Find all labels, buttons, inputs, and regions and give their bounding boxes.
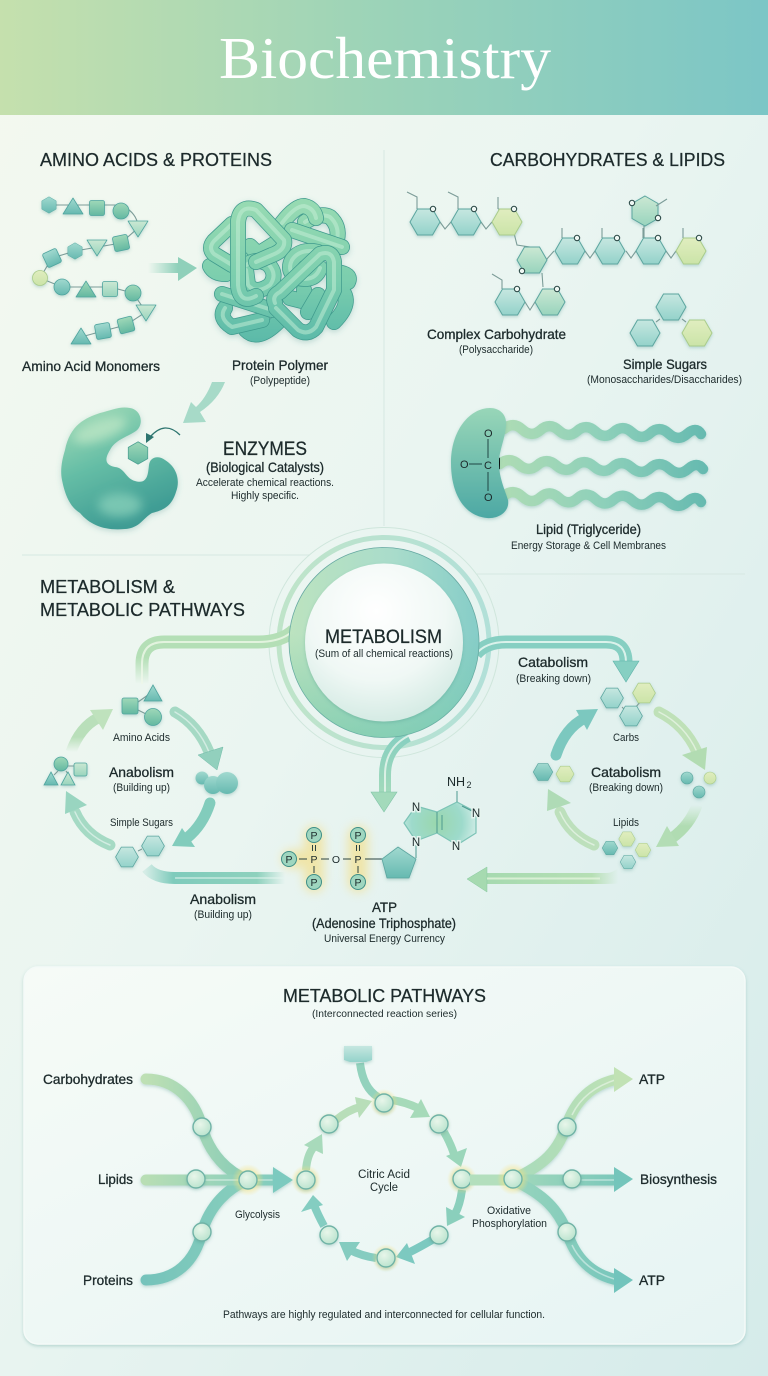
ATP molecule: P xyxy=(285,854,293,866)
panel: metabolism xyxy=(40,528,716,945)
arrow: catabolism bottom left xyxy=(547,789,594,845)
label: carbs: Carbs xyxy=(613,732,639,744)
label: ATP: ATP xyxy=(372,899,397,915)
arrow: monomers to polymer xyxy=(148,257,197,281)
nodes: inputs xyxy=(187,1118,211,1241)
ATP molecule: P xyxy=(310,877,318,889)
footer note: Pathways are highly regulated and interconnected for cellular function. xyxy=(223,1309,545,1321)
label: enzymes: ENZYMES xyxy=(223,439,307,460)
phosphate glow xyxy=(282,826,368,892)
label: enzymes: (Biological Catalysts) xyxy=(206,459,324,475)
title banner xyxy=(0,0,768,115)
top feeder xyxy=(344,1046,378,1097)
heading: metabolism xyxy=(40,577,245,620)
node: glycolysis hub xyxy=(232,1164,264,1196)
heading: metabolism: METABOLIC PATHWAYS xyxy=(40,600,245,620)
diverging outputs xyxy=(470,1067,633,1293)
label: lipid: Lipid (Triglyceride) xyxy=(536,521,641,537)
ATP molecule: O xyxy=(332,854,340,866)
label: breaking down: (Breaking down) xyxy=(589,782,663,794)
enzyme xyxy=(61,407,180,529)
label: citric acid: Citric Acid xyxy=(358,1169,410,1181)
label: building up lower: (Building up) xyxy=(194,909,252,921)
label: protein polymer: Protein Polymer xyxy=(232,357,328,373)
label: complex carbohydrate: Complex Carbohydrate xyxy=(427,326,566,342)
label: metabolism: METABOLISM xyxy=(325,627,442,648)
label: enzymes: Accelerate chemical reactions. xyxy=(196,477,334,489)
metabolism sphere xyxy=(289,548,479,738)
label: anabolism center: Anabolism xyxy=(109,764,174,780)
ATP molecule: P xyxy=(310,854,318,866)
label: oxidative phosphorylation: Oxidative xyxy=(487,1205,531,1217)
lipids hexagons xyxy=(602,832,651,869)
label: lipids: Lipids xyxy=(98,1171,133,1187)
heading: carbohydrates: CARBOHYDRATES & LIPIDS xyxy=(490,150,725,170)
converging inputs xyxy=(146,1079,293,1280)
lipid triglyceride: O xyxy=(484,428,493,440)
arrow: anabolism top right xyxy=(175,712,223,770)
arrow: anabolism top left xyxy=(71,709,113,752)
label: simple sugars: Simple Sugars xyxy=(110,817,173,829)
panel: amino acids and proteins xyxy=(22,150,349,529)
ATP molecule: P xyxy=(354,854,362,866)
label: biosynthesis: Biosynthesis xyxy=(640,1171,717,1187)
label: amino acids: Amino Acids xyxy=(113,732,170,744)
label: simple sugars: Simple Sugars xyxy=(623,356,707,372)
adenine xyxy=(404,775,480,858)
label: enzymes: Highly specific. xyxy=(231,490,299,502)
nodes: outputs xyxy=(558,1118,581,1241)
heading: metabolism: METABOLISM & xyxy=(40,577,175,597)
label: oxidative phosphorylation: Phosphorylation xyxy=(472,1218,547,1230)
flow: metabolism to catabolism xyxy=(476,642,639,682)
label: oxidative phosphorylation xyxy=(472,1205,547,1230)
label: lipids: Lipids xyxy=(613,817,639,829)
node: oxidative hub xyxy=(497,1163,529,1195)
sugars hexagons xyxy=(116,836,164,867)
amino acids molecule xyxy=(122,685,162,726)
sphere outer rings xyxy=(269,528,499,758)
label: energy storage: Energy Storage & Cell Membranes xyxy=(511,540,666,552)
protein polymer xyxy=(210,206,349,334)
heading: metabolic pathways: METABOLIC PATHWAYS xyxy=(283,986,486,1006)
label: sum of reactions: (Sum of all chemical reactions) xyxy=(315,648,453,660)
lipid triglyceride: O xyxy=(484,492,493,504)
phosphate bonds xyxy=(299,845,383,873)
label: polysaccharide: (Polysaccharide) xyxy=(459,344,533,356)
arrow: anabolism bottom left xyxy=(65,791,110,845)
adenine: N xyxy=(412,837,420,849)
label: breaking down upper: (Breaking down) xyxy=(516,673,591,685)
arrow: anabolism bottom right xyxy=(172,803,210,847)
subheading: (Interconnected reaction series) xyxy=(312,1008,457,1020)
label: adenosine triphosphate: (Adenosine Triphosphate) xyxy=(312,915,456,931)
simple sugars xyxy=(630,294,712,346)
molecule: left xyxy=(44,757,87,785)
complex carbohydrate structure xyxy=(407,192,706,315)
panel: carbohydrates and lipids xyxy=(407,150,742,552)
ATP molecule: P xyxy=(354,877,362,889)
catabolism cycle xyxy=(533,683,716,869)
cycle glow xyxy=(291,1089,477,1272)
label: cycle: Cycle xyxy=(370,1182,398,1194)
label: amino acid monomers: Amino Acid Monomers xyxy=(22,358,160,374)
molecule: left pair xyxy=(533,764,574,782)
carbs hexagons xyxy=(601,683,655,726)
ATP molecule: P xyxy=(310,830,318,842)
label: catabolism center: Catabolism xyxy=(591,764,661,780)
ATP molecule: P xyxy=(354,830,362,842)
molecule: circles xyxy=(681,772,716,798)
label: building up: (Building up) xyxy=(113,782,170,794)
arrow: catabolism bottom right xyxy=(656,805,697,847)
adenine: N xyxy=(452,841,460,853)
panel: metabolic pathways xyxy=(24,967,745,1344)
adenine: N xyxy=(472,808,480,820)
label: ATP top: ATP xyxy=(639,1071,665,1087)
pentagon sugar xyxy=(382,847,416,878)
adenine: NH xyxy=(447,775,465,789)
adenine: 2 xyxy=(466,780,472,790)
arrow: catabolism top right xyxy=(659,712,707,770)
lipid triglyceride: C xyxy=(484,460,492,472)
lipid triglyceride: O xyxy=(460,459,469,471)
label: monosaccharides: (Monosaccharides/Disaccharides) xyxy=(587,374,742,386)
label: proteins: Proteins xyxy=(83,1272,133,1288)
amino acid chain xyxy=(32,197,156,344)
label: catabolism upper: Catabolism xyxy=(518,654,588,670)
label: glycolysis: Glycolysis xyxy=(235,1209,280,1221)
arrow: catabolism top left xyxy=(556,709,598,755)
anabolism flow to ATP xyxy=(147,868,285,878)
flow: metabolism to ATP xyxy=(371,736,408,812)
label: anabolism lower: Anabolism xyxy=(190,891,256,907)
title: Biochemistry xyxy=(219,25,552,91)
adenine: N xyxy=(412,802,420,814)
cycle nodes xyxy=(297,1094,471,1267)
lipid triglyceride xyxy=(451,408,703,518)
flow: metabolism to anabolism xyxy=(142,630,294,684)
label: carbohydrates: Carbohydrates xyxy=(43,1071,133,1087)
heading: amino acids: AMINO ACIDS & PROTEINS xyxy=(40,150,272,170)
label: energy currency: Universal Energy Currency xyxy=(324,933,445,945)
cycle arrows xyxy=(301,1097,467,1264)
citric acid cycle xyxy=(291,1046,477,1272)
label: polypeptide: (Polypeptide) xyxy=(250,375,310,387)
arrow: polymer to enzyme xyxy=(183,382,225,423)
ATP molecule xyxy=(282,775,480,945)
label: enzymes xyxy=(196,439,334,502)
molecule: right xyxy=(196,772,238,794)
anabolism cycle xyxy=(44,685,238,867)
label: ATP bottom: ATP xyxy=(639,1272,665,1288)
catabolism flow to ATP xyxy=(467,866,622,892)
